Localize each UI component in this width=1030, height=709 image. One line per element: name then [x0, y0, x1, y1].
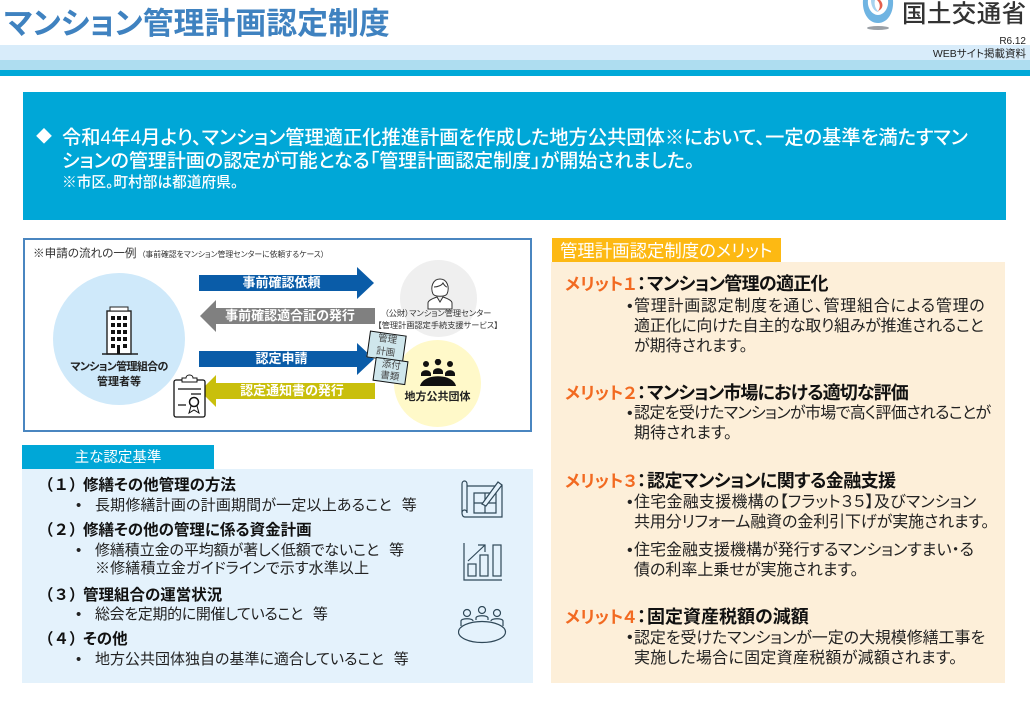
merit 1 — [565, 274, 985, 355]
summary text — [62, 127, 968, 172]
merit 3: • — [627, 494, 633, 511]
government label: 地方公共団体 — [404, 391, 470, 403]
criteria heading — [22, 445, 214, 469]
merit 3: ： — [637, 471, 646, 491]
merit 1: マンション管理の適正化 — [647, 274, 828, 294]
icon: person — [428, 278, 452, 310]
merit 1: 管理計画認定制度を通じ、管理組合による管理の — [634, 298, 985, 315]
merit 2: 認定を受けたマンションが市場で高く評価されることが — [634, 405, 990, 422]
criteria text: • — [76, 542, 81, 559]
criteria text: 地方公共団体独自の基準に適合していること 等 — [95, 651, 409, 668]
merit 2: • — [627, 405, 633, 422]
criteria text: （３） — [38, 587, 85, 604]
merit 2: 期待されます。 — [634, 425, 732, 442]
icon: bar chart — [463, 543, 502, 581]
criteria text: • — [76, 606, 81, 623]
arrow: certification notice: 認定通知書の発行 — [240, 383, 344, 398]
circle: local government — [394, 340, 481, 427]
icon: building — [102, 306, 138, 355]
managers label: マンション管理組合の — [70, 361, 168, 373]
circle: center — [400, 260, 477, 337]
merit 4: 固定資産税額の減額 — [647, 607, 809, 627]
criteria text: • — [76, 497, 81, 514]
merits heading: 管理計画認定制度のメリット — [560, 241, 772, 261]
criteria text: 長期修繕計画の計画期間が一定以上あること 等 — [95, 497, 417, 514]
merit 2: メリット２ — [565, 384, 636, 403]
footnote: ※市区。町村部は都道府県。 — [62, 175, 238, 191]
icon: blueprint — [461, 480, 503, 518]
merit 4: ： — [637, 607, 646, 627]
merit 3 — [565, 471, 989, 579]
criteria panel — [22, 469, 533, 683]
criteria text: 修繕その他の管理に係る資金計画 — [83, 522, 312, 539]
criteria text: ※修繕積立金ガイドラインで示す水準以上 — [95, 560, 369, 577]
merit 3: 住宅金融支援機構の【フラット３５】及びマンション — [634, 494, 976, 511]
icon: certificate — [173, 374, 206, 418]
criteria heading: 主な認定基準 — [75, 450, 161, 466]
icon: meeting table — [458, 606, 506, 644]
flow panel — [23, 238, 532, 432]
date and notice — [932, 36, 1026, 60]
arrow: certification application — [199, 343, 374, 375]
merit 1: • — [627, 298, 633, 315]
circle: managers — [53, 273, 185, 405]
flow caption: ※申請の流れの一例 （事前確認をマンション管理センターに依頼するケース） — [33, 247, 325, 260]
bullet: ◆ — [36, 129, 52, 146]
merit 2 — [565, 383, 991, 442]
criteria text: 修繕積立金の平均額が著しく低額でないこと 等 — [95, 542, 404, 559]
header band — [0, 45, 1030, 76]
document: attachments: 添付 — [381, 359, 401, 372]
document: management plan — [366, 331, 407, 362]
criteria text: （１） — [38, 477, 85, 494]
document: attachments — [372, 357, 409, 385]
criteria text: その他 — [83, 631, 128, 648]
ministry logo — [862, 0, 1026, 30]
summary text: 令和4年4月より、マンション管理適正化推進計画を作成した地方公共団体※において、一定の基準を満たすマン — [62, 128, 968, 148]
managers label — [70, 360, 168, 388]
arrow: certification application: 認定申請 — [255, 351, 308, 366]
merit 3: メリット３ — [565, 472, 636, 491]
criteria text: （２） — [38, 522, 85, 539]
arrow: pre-check certificate — [200, 300, 375, 332]
date and notice: R6.12 — [999, 36, 1026, 47]
merit 1: メリット１ — [565, 275, 636, 294]
merit 1: が期待されます。 — [634, 338, 748, 355]
merit 3: 住宅金融支援機構が発行するマンションすまい・る — [634, 542, 974, 559]
merit 1: 適正化に向けた自主的な取り組みが推進されること — [634, 318, 983, 335]
criteria text: • — [76, 651, 81, 668]
merit 4: 認定を受けたマンションが一定の大規模修繕工事を — [634, 630, 985, 647]
document: management plan: 計画 — [376, 345, 396, 359]
date and notice: WEBサイト掲載資料 — [933, 48, 1026, 60]
center label: 【管理計画認定手続支援サービス】 — [378, 320, 498, 330]
title: マンション管理計画認定制度 — [4, 6, 390, 41]
criteria text: （４） — [38, 631, 85, 648]
merit 4: • — [627, 629, 633, 646]
center label: （公財）マンション管理センター — [385, 309, 491, 318]
icon: meeting — [420, 359, 456, 386]
merit 4 — [565, 607, 985, 667]
merit 4: 実施した場合に固定資産税額が減額されます。 — [634, 650, 957, 667]
merit 3: 共用分リフォーム融資の金利引下げが実施されます。 — [634, 514, 989, 531]
merit 4: メリット４ — [565, 608, 636, 627]
criteria text — [38, 476, 417, 668]
summary text: ションの管理計画の認定が可能となる「管理計画認定制度」が開始されました。 — [62, 150, 694, 172]
arrow: pre-check certificate: 事前確認適合証の発行 — [225, 308, 355, 323]
ministry logo: 国土交通省 — [902, 1, 1026, 28]
merit 2: ： — [637, 383, 646, 403]
center label — [378, 309, 498, 330]
criteria text: 総会を定期的に開催していること 等 — [95, 606, 328, 623]
document: attachments: 書類 — [380, 370, 400, 383]
arrow: certification notice — [206, 375, 375, 407]
merit 3: • — [627, 542, 633, 559]
summary box — [23, 92, 1006, 220]
criteria text: 管理組合の運営状況 — [83, 587, 222, 604]
merit 3: 認定マンションに関する金融支援 — [647, 471, 896, 491]
managers label: 管理者等 — [97, 376, 141, 388]
merit 2: マンション市場における適切な評価 — [647, 383, 908, 403]
arrow: pre-check request: 事前確認依頼 — [242, 275, 320, 290]
merit 1: ： — [637, 274, 646, 294]
merit 3: 債の利率上乗せが実施されます。 — [634, 562, 858, 579]
merits panel — [551, 262, 1005, 683]
criteria text: 修繕その他管理の方法 — [83, 477, 236, 494]
arrow: pre-check request — [199, 267, 374, 299]
document: management plan: 管理 — [377, 333, 398, 346]
